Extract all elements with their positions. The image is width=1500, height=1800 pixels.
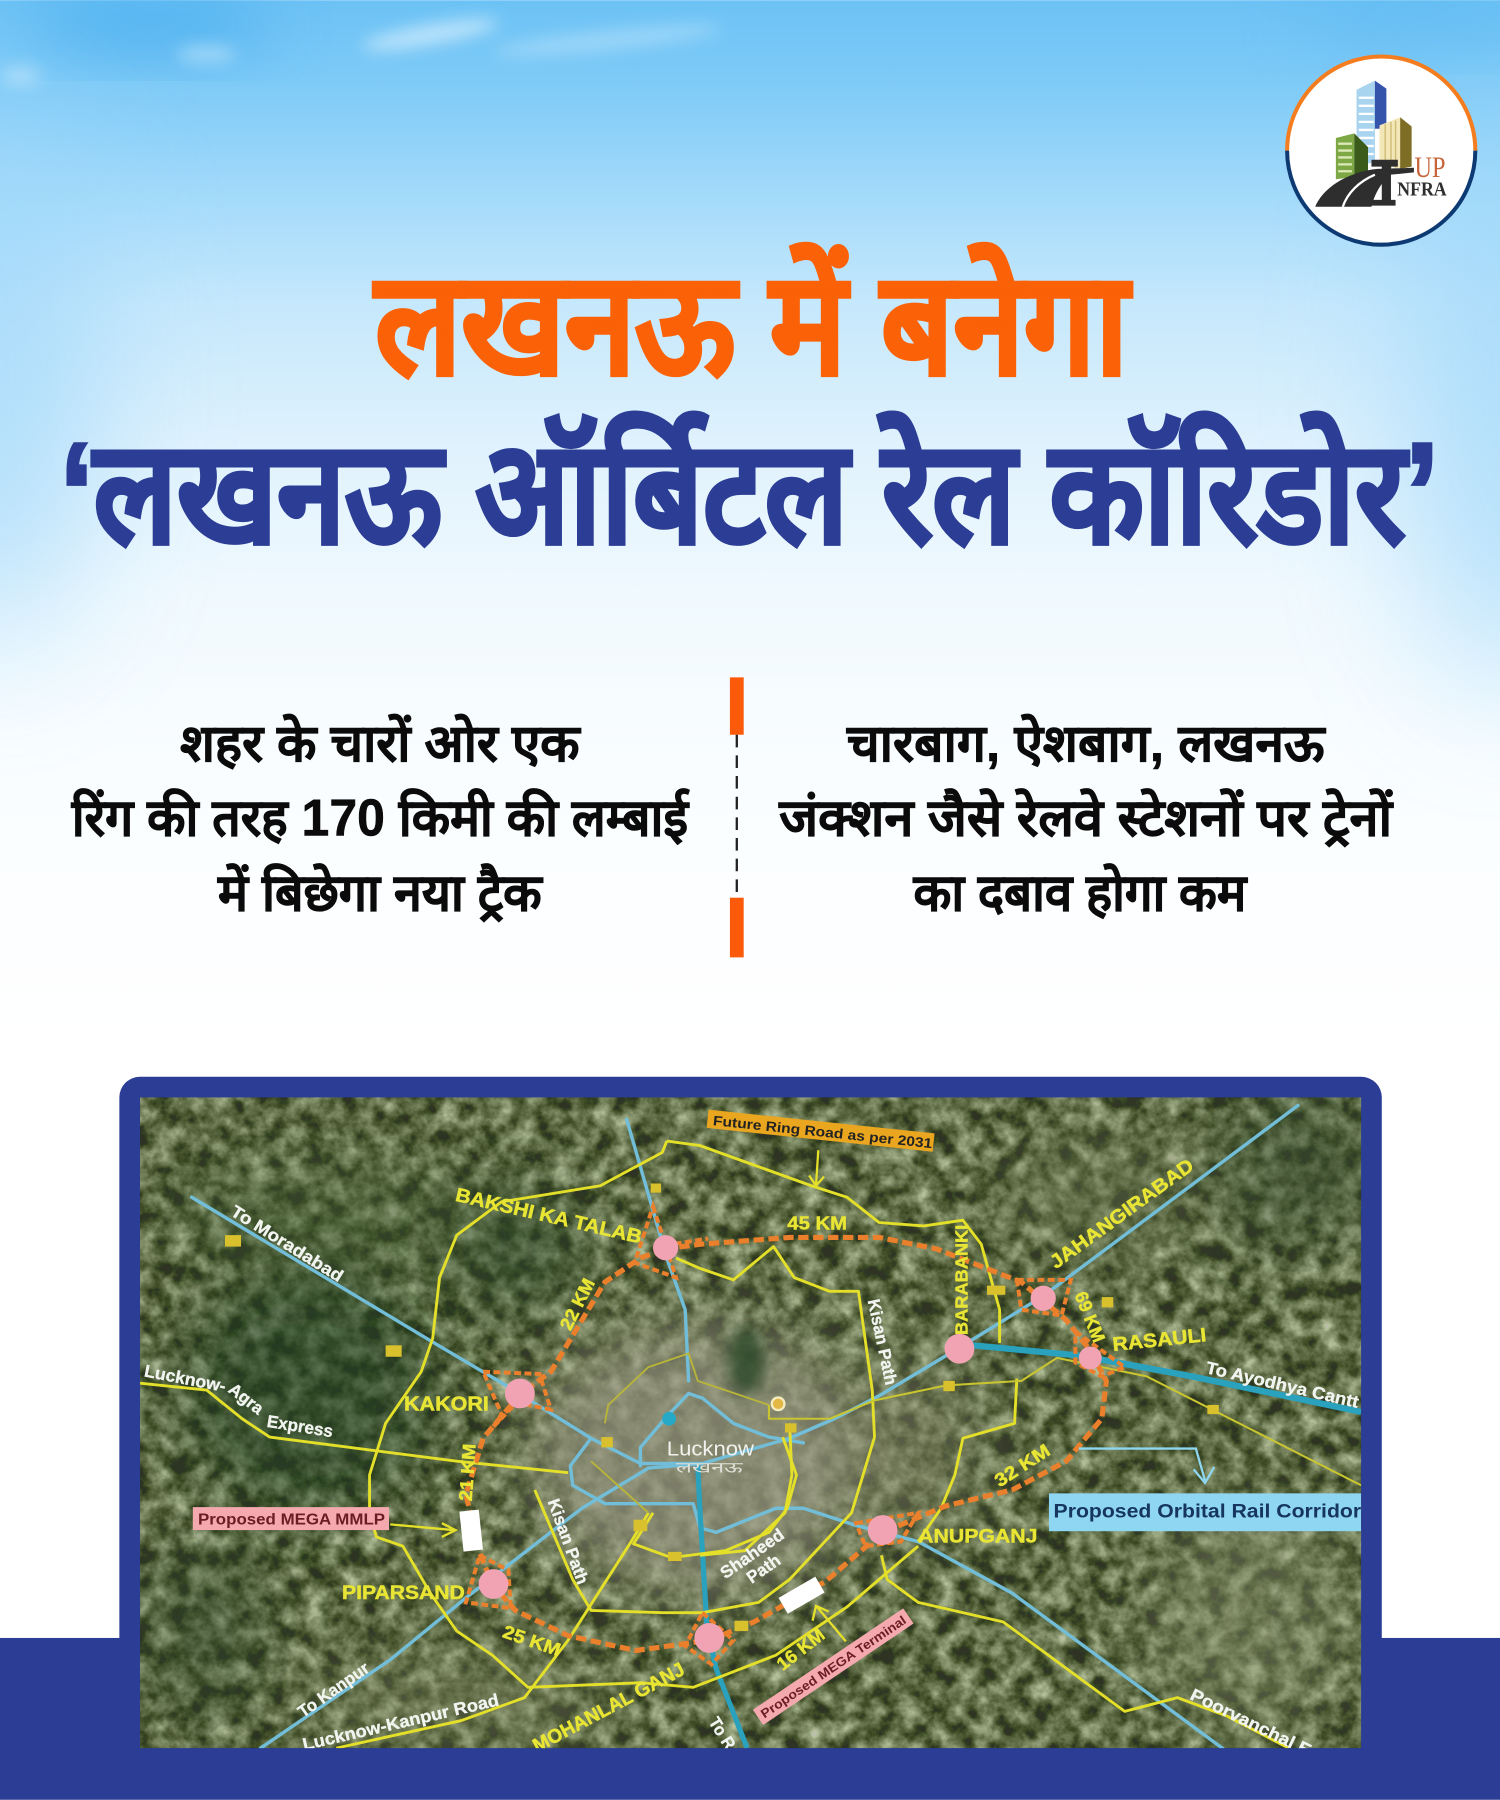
left description: रिंग की तरह 170 किमी की लम्बाई xyxy=(71,788,690,847)
callout: proposed mega MMLP xyxy=(193,1507,456,1537)
yellow station labels: JAHANGIRABAD xyxy=(1046,1155,1198,1274)
logo ring top half xyxy=(1287,56,1475,151)
yellow distance labels xyxy=(455,1212,1110,1674)
right description: जंक्शन जैसे रेलवे स्टेशनों पर ट्रेनों xyxy=(778,788,1394,848)
yellow distance labels: 25 KM xyxy=(500,1621,563,1660)
callout: proposed orbital rail corridor xyxy=(1049,1449,1362,1531)
yellow distance labels: 22 KM xyxy=(555,1275,599,1333)
yellow station labels: PIPARSAND xyxy=(342,1582,465,1604)
station: Piparsand xyxy=(479,1569,508,1599)
white route labels: Express xyxy=(266,1411,335,1441)
station: Barabanki xyxy=(945,1334,974,1364)
station: Mohanlalganj xyxy=(694,1623,724,1653)
callout: proposed mega MMLP: Proposed MEGA MMLP xyxy=(198,1511,385,1528)
logo ring bottom half xyxy=(1287,151,1475,245)
yellow distance labels: 16 KM xyxy=(772,1624,829,1674)
left description: शहर के चारों ओर एक xyxy=(180,713,582,772)
yellow distance labels: 69 KM xyxy=(1071,1288,1110,1345)
yellow roads xyxy=(140,1141,1361,1748)
airport marker xyxy=(772,1398,784,1410)
white route labels: Kisan Path xyxy=(864,1297,901,1387)
white route labels: Shaheed xyxy=(716,1524,788,1583)
white route labels: Agra xyxy=(225,1379,268,1419)
callout: proposed mega terminal xyxy=(753,1606,914,1725)
highway markers xyxy=(225,1183,1219,1631)
bottom navy band xyxy=(0,1638,1500,1800)
blue rail lines xyxy=(192,1105,1298,1748)
city label Lucknow: लखनऊ xyxy=(676,1461,743,1477)
yellow station labels: MOHANLAL GANJ xyxy=(529,1659,688,1757)
proposed orbital corridor dashed ring xyxy=(466,1237,1106,1651)
right description: का दबाव होगा कम xyxy=(913,862,1248,921)
left description xyxy=(71,713,690,922)
teal thick rail lines xyxy=(698,1345,1361,1748)
white route labels: To Kanpur xyxy=(294,1658,373,1722)
icon: road xyxy=(1315,168,1414,207)
logo letter I xyxy=(1371,160,1398,206)
yellow distance labels: 21 KM xyxy=(455,1443,480,1502)
logo: UP Infra xyxy=(1287,56,1475,245)
station: Bakshi Ka Talab xyxy=(653,1235,678,1260)
white route labels: To Ayodhya Cantt xyxy=(1204,1357,1361,1412)
yellow distance labels: 32 KM xyxy=(990,1440,1054,1491)
white site: Mega MMLP xyxy=(459,1510,483,1552)
white route labels: Poorvanchal E xyxy=(1187,1684,1315,1760)
callout: proposed orbital rail corridor: Proposed Orbital Rail Corridor xyxy=(1054,1501,1362,1522)
satellite base xyxy=(138,1091,1377,1748)
logo text UP: UP xyxy=(1414,151,1445,184)
right description xyxy=(778,713,1394,921)
map frame xyxy=(119,1077,1382,1765)
logo text NFRA: NFRA xyxy=(1397,179,1447,200)
city label Lucknow: Lucknow xyxy=(667,1437,754,1460)
white site: Mega Terminal xyxy=(779,1577,825,1614)
icon: blue tower xyxy=(1357,81,1386,163)
yellow station labels: RASAULI xyxy=(1111,1324,1207,1356)
callout: proposed mega terminal: Proposed MEGA Terminal xyxy=(758,1613,909,1721)
icon: green tower xyxy=(1336,133,1368,179)
white route labels: To Moradabad xyxy=(227,1201,347,1286)
white route labels: To R xyxy=(705,1713,740,1753)
airport-city marker xyxy=(662,1412,676,1426)
white route labels xyxy=(143,1201,1361,1760)
logo disc xyxy=(1287,56,1475,245)
icon: yellow tower xyxy=(1379,117,1412,169)
yellow station labels: KAKORI xyxy=(404,1393,489,1416)
station: Kakori xyxy=(505,1379,535,1408)
white route labels: Lucknow- xyxy=(143,1361,228,1396)
yellow station labels xyxy=(342,1155,1207,1757)
station interchange triangles xyxy=(466,1206,1125,1664)
white route labels: Path xyxy=(743,1550,784,1587)
city label Lucknow xyxy=(667,1437,754,1477)
yellow distance labels: 45 KM xyxy=(787,1212,847,1233)
white route labels: Lucknow-Kanpur Road xyxy=(301,1690,501,1754)
callout: future ring road xyxy=(707,1110,935,1186)
center divider xyxy=(730,677,744,957)
title line 1: लखनऊ में बनेगा xyxy=(373,243,1133,404)
station: Jahangirabad xyxy=(1031,1286,1056,1311)
map panel xyxy=(138,1091,1377,1760)
callout: future ring road: Future Ring Road as per 2031 xyxy=(712,1113,933,1151)
yellow station labels: ANUPGANJ xyxy=(918,1526,1037,1548)
yellow station labels: BARABANKI xyxy=(951,1225,971,1335)
left description: में बिछेगा नया ट्रैक xyxy=(217,862,544,922)
station: Rasauli xyxy=(1079,1346,1102,1369)
station: Anupganj xyxy=(868,1515,897,1545)
yellow station labels: BAKSHI KA TALAB xyxy=(453,1184,644,1248)
white route labels: Kisan Path xyxy=(544,1496,593,1587)
right description: चारबाग, ऐशबाग, लखनऊ xyxy=(846,713,1327,772)
